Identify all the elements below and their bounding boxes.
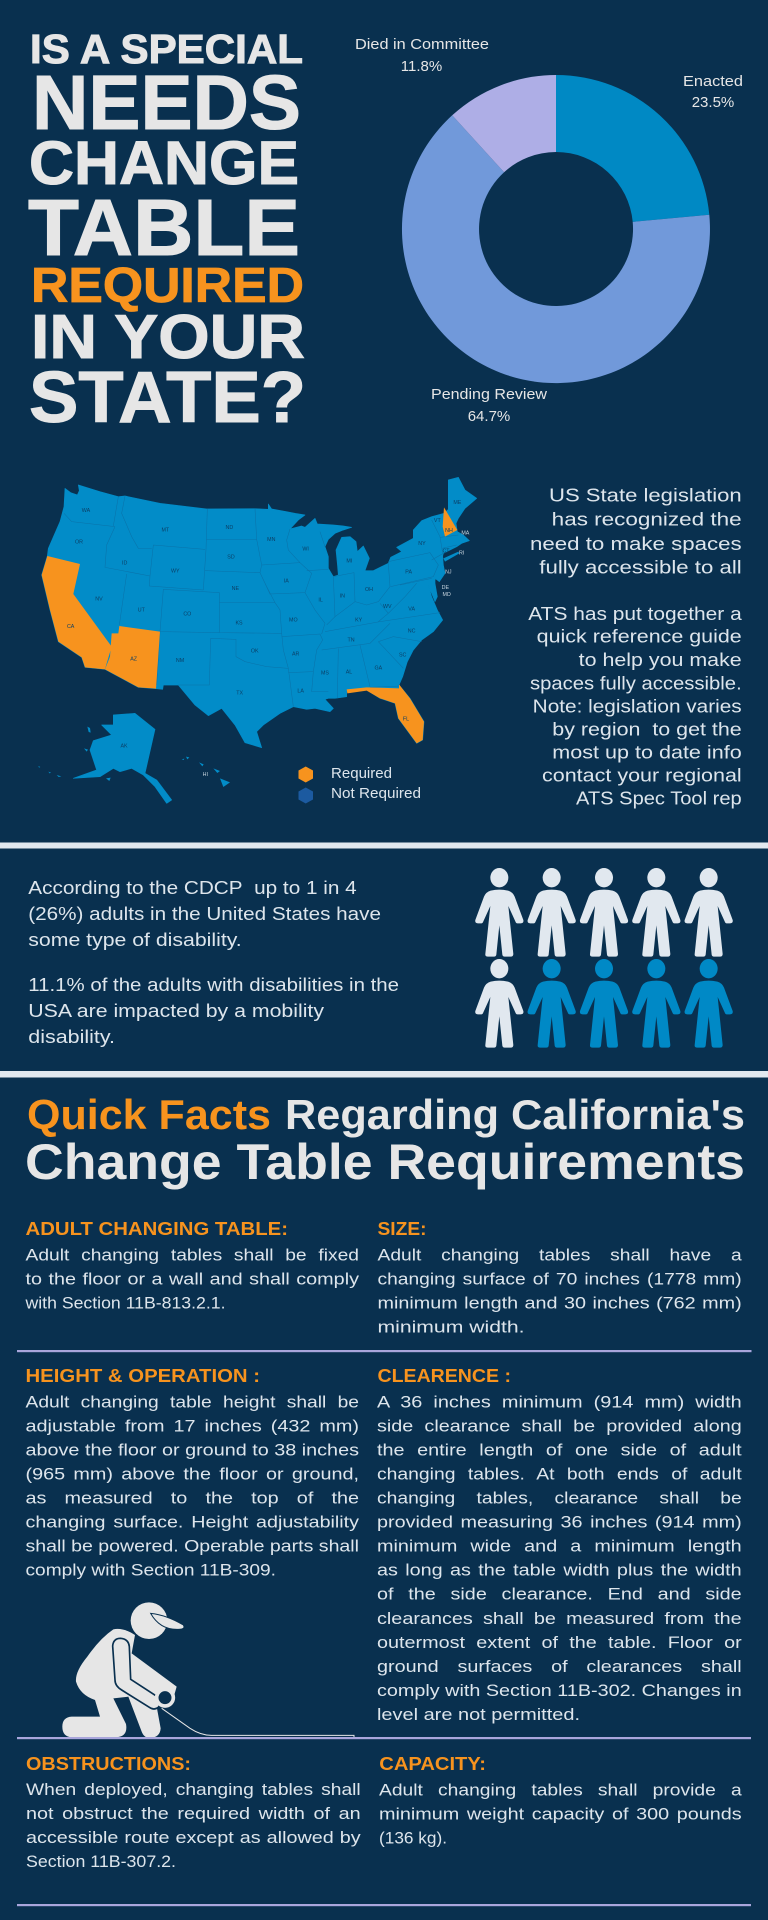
section: clearence: A 36 inches minimum (914 mm) width — [377, 1394, 742, 1412]
US map: MI — [346, 559, 352, 565]
section: clearence: level are not permitted. — [377, 1706, 580, 1724]
US map: CT — [442, 549, 450, 555]
US map: NJ — [445, 570, 452, 576]
US map: IN — [340, 593, 345, 599]
title: REQUIRED — [31, 259, 304, 313]
label: enacted: Enacted — [683, 73, 743, 90]
heading: quick facts: Quick Facts — [27, 1091, 271, 1138]
section: height and operation — [26, 1366, 360, 1580]
text block: legislation intro: US State legislation — [549, 486, 742, 506]
text block: disability statistics: 11.1% of the adults with disabilities in the — [28, 975, 399, 995]
US map: WI — [302, 546, 309, 552]
US map: LA — [297, 688, 304, 694]
section: adult changing table — [24, 1219, 360, 1312]
title: TABLE — [28, 183, 300, 272]
required states: CA, AZ, NH, FL — [42, 507, 457, 743]
US map: CO — [183, 612, 191, 618]
section: clearence: of the side clearance. End and side — [377, 1586, 742, 1604]
US map: KS — [235, 621, 243, 627]
title: STATE? — [29, 358, 306, 438]
title: IN YOUR — [31, 303, 305, 372]
section: height and operation: shall be powered. Operable parts shall — [26, 1538, 359, 1556]
US map: AR — [292, 651, 300, 657]
US map: AZ — [130, 657, 138, 663]
text block: disability statistics: some type of disability. — [28, 930, 242, 950]
text block: ATS reference guide: spaces fully accessible. — [530, 673, 742, 693]
text block: disability statistics: USA are impacted by a mobility — [28, 1001, 324, 1021]
US map: HI — [203, 772, 208, 778]
US map: FL — [403, 717, 409, 723]
label: enacted: 23.5% — [692, 94, 734, 111]
US map: WV — [383, 604, 392, 610]
text block: ATS reference guide: Note: legislation varies — [533, 696, 742, 716]
section: capacity: (136 kg). — [379, 1830, 447, 1848]
section: height and operation: comply with Section 11B-309. — [26, 1562, 276, 1580]
section: capacity — [379, 1754, 743, 1848]
US map: ID — [122, 560, 127, 566]
US map: IA — [284, 579, 289, 585]
US map: MS — [321, 671, 329, 677]
US map: AL — [346, 670, 352, 676]
US map: VA — [408, 606, 415, 612]
section: clearence: changing tables, clearance shall be — [377, 1490, 742, 1508]
label: pending review: Pending Review — [431, 386, 547, 403]
text block: legislation intro: need to make spaces — [530, 534, 742, 554]
text block: ATS reference guide: quick reference guide — [537, 627, 742, 647]
text block: ATS reference guide: to help you make — [579, 650, 742, 670]
section: capacity: CAPACITY: — [379, 1754, 486, 1774]
US map: OH — [365, 587, 373, 593]
text block: ATS reference guide — [528, 604, 743, 808]
section: clearence: the entire length of one side of adult — [377, 1442, 742, 1460]
US map: DE — [442, 585, 449, 591]
section: height and operation: as measured to the top of the — [26, 1490, 359, 1508]
section: clearence: CLEARENCE : — [378, 1366, 511, 1386]
US map: PA — [405, 570, 412, 576]
US map: NC — [408, 629, 416, 635]
section: size — [378, 1219, 743, 1336]
section: obstructions: not obstruct the required width of an — [26, 1805, 361, 1823]
US map: SC — [399, 652, 407, 658]
section: obstructions — [26, 1754, 362, 1871]
text block: disability statistics: According to the CDCP up to 1 in 4 — [28, 878, 357, 898]
text block: ATS reference guide: ATS has put together a — [528, 604, 743, 624]
section: obstructions: accessible route except as allowed by — [26, 1829, 362, 1847]
US map: ME — [453, 500, 462, 506]
text block: ATS reference guide: ATS Spec Tool rep — [576, 788, 742, 808]
US map: NH — [445, 528, 453, 534]
section: clearence: minimum wide and a minimum length — [377, 1538, 742, 1556]
US map: GA — [374, 665, 383, 671]
label: pending review — [431, 386, 547, 425]
US map: NY — [418, 541, 426, 547]
text block: disability statistics — [28, 878, 399, 1047]
icon: kneeling worker with cable — [62, 1602, 354, 1738]
text block: legislation intro: fully accessible to all — [539, 557, 742, 577]
section: adult changing table: to the floor or a wall and shall comply — [26, 1270, 360, 1288]
heading: quick facts: Change Table Requirements — [25, 1134, 745, 1190]
US map: OK — [251, 648, 259, 654]
section: height and operation: HEIGHT & OPERATION : — [26, 1366, 260, 1386]
US map: MA — [461, 531, 470, 537]
US map: NV — [95, 597, 103, 603]
label: died in committee: 11.8% — [401, 58, 442, 75]
section: clearence: outermost extent of the table. Floor or — [377, 1634, 742, 1652]
section: height and operation: above the floor or ground to 38 inches — [26, 1442, 359, 1460]
donut chart: bill status — [402, 75, 710, 383]
US map: RI — [459, 550, 464, 556]
US map: CA — [67, 624, 75, 630]
section: adult changing table: ADULT CHANGING TABLE: — [26, 1219, 288, 1239]
section: size: Adult changing tables shall have a — [378, 1246, 743, 1264]
section: size: minimum width. — [378, 1318, 524, 1336]
section: height and operation: (965 mm) above the floor or ground, — [26, 1466, 359, 1484]
text block: ATS reference guide: most up to date info — [552, 742, 742, 762]
US map: ND — [225, 525, 233, 531]
section: size: SIZE: — [378, 1219, 426, 1239]
map legend — [298, 766, 421, 804]
section: obstructions: When deployed, changing tables shall — [26, 1781, 361, 1799]
label: died in committee — [355, 36, 489, 75]
text block: legislation intro: has recognized the — [552, 510, 742, 530]
US map: TX — [236, 691, 244, 697]
Alaska — [73, 713, 172, 803]
US map: MT — [161, 527, 170, 533]
title: CHANGE — [29, 129, 299, 197]
section: obstructions: Section 11B-307.2. — [26, 1853, 176, 1871]
section: capacity: minimum weight capacity of 300 pounds — [379, 1805, 742, 1823]
text block: ATS reference guide: contact your regional — [542, 765, 742, 785]
Aleutians and Hawaii — [38, 727, 230, 787]
section: clearence: side clearance shall be provided along — [377, 1418, 742, 1436]
US map: TN — [347, 637, 355, 643]
US map: MD — [443, 592, 451, 598]
heading: quick facts: Regarding California's — [285, 1091, 745, 1138]
US map: NE — [232, 586, 239, 592]
text block: disability statistics: disability. — [28, 1027, 115, 1047]
map legend: Not Required — [331, 786, 421, 802]
heading: quick facts — [25, 1091, 745, 1190]
text block: ATS reference guide: by region to get the — [552, 719, 742, 739]
section: adult changing table: Adult changing tables shall be fixed — [26, 1246, 359, 1264]
pictogram: ten people — [475, 868, 733, 1048]
US map: MO — [289, 617, 298, 623]
US map: UT — [138, 607, 146, 613]
section: clearence: provided measuring 36 inches (914 mm) — [377, 1514, 742, 1532]
US map: AK — [120, 744, 128, 750]
section: obstructions: OBSTRUCTIONS: — [26, 1754, 191, 1774]
section: clearence: as long as the table width plus the width — [377, 1562, 742, 1580]
US map: MN — [267, 537, 276, 543]
map legend: Required — [331, 766, 392, 782]
US map: NM — [176, 658, 184, 664]
title — [28, 26, 306, 438]
section: height and operation: Adult changing table height shall be — [26, 1394, 359, 1412]
US map: VT — [434, 518, 441, 524]
section: capacity: Adult changing tables shall provide a — [379, 1781, 743, 1799]
text block: legislation intro — [530, 486, 742, 577]
section: clearence: changing tables. At both ends of adult — [377, 1466, 742, 1484]
section: size: minimum length and 30 inches (762 mm) — [378, 1294, 742, 1312]
section: clearence — [377, 1366, 742, 1724]
section: clearence: clearances shall be measured from the — [377, 1610, 742, 1628]
text block: disability statistics: (26%) adults in the United States have — [28, 904, 381, 924]
title: IS A SPECIAL — [30, 26, 303, 72]
section: clearence: comply with Section 11B-302. Changes in — [377, 1682, 742, 1700]
US map: WY — [171, 569, 180, 575]
label: pending review: 64.7% — [468, 408, 510, 425]
label: enacted — [683, 73, 743, 111]
section: height and operation: changing surface. Height adjustability — [26, 1514, 360, 1532]
US map: KY — [355, 618, 363, 624]
US map: IL — [318, 598, 323, 604]
section: size: changing surface of 70 inches (1778 mm) — [378, 1270, 742, 1288]
US map: WA — [82, 508, 91, 514]
title: NEEDS — [32, 60, 301, 146]
section: height and operation: adjustable from 17 inches (432 mm) — [26, 1418, 359, 1436]
section: adult changing table: with Section 11B-813.2.1. — [24, 1294, 225, 1312]
section: clearence: ground surfaces of clearances shall — [377, 1658, 742, 1676]
US map — [38, 477, 477, 803]
US map: SD — [227, 554, 235, 560]
label: died in committee: Died in Committee — [355, 36, 489, 53]
US map: OR — [75, 539, 83, 545]
